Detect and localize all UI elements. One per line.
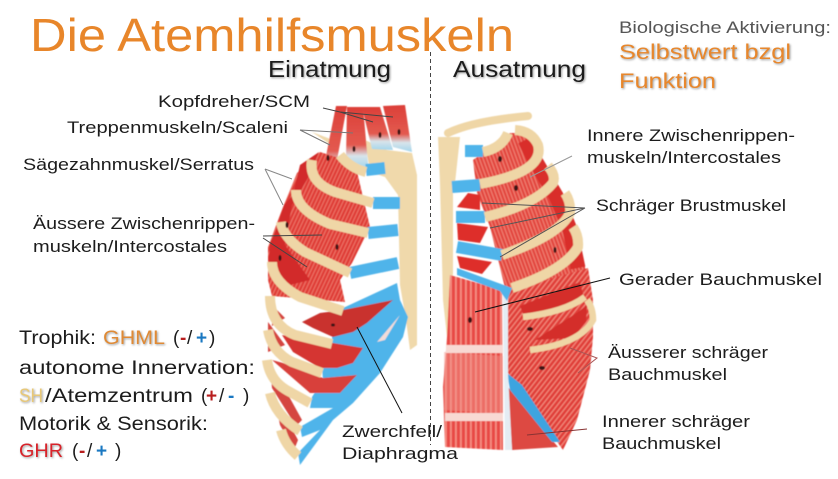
text block: trophic, autonomic, motor legend: GHML — [103, 328, 165, 349]
leader lines: inhalation — [263, 108, 402, 413]
text block: trophic, autonomic, motor legend: ) — [115, 441, 121, 462]
labels: exhalation muscles — [587, 126, 822, 453]
heading: Ausatmung: Ausatmung — [453, 56, 586, 82]
text block: trophic, autonomic, motor legend: ( — [201, 386, 208, 407]
ribs — [267, 155, 373, 456]
upper ribs — [480, 130, 578, 288]
labels: inhalation muscles: muskeln/Intercostales — [33, 237, 227, 256]
costal cartilages — [452, 151, 502, 255]
text block: biological activation — [619, 18, 831, 93]
labels: inhalation muscles: Treppenmuskeln/Scaleni — [67, 118, 288, 137]
text block: trophic, autonomic, motor legend: - — [228, 386, 234, 407]
intercostal muscles, upper — [268, 152, 370, 302]
inner intercostal muscles — [457, 193, 492, 274]
text block: trophic, autonomic, motor legend: /Atemzentrum — [45, 386, 193, 407]
white slit — [377, 315, 400, 342]
deep red outer band — [525, 140, 578, 268]
text block: trophic, autonomic, motor legend: / — [219, 386, 225, 407]
labels: exhalation muscles: Äusserer schräger — [608, 343, 768, 362]
costal cartilage and lower rib margin — [298, 283, 408, 465]
text block: biological activation: Biologische Aktivierung: — [619, 18, 831, 37]
pale linea alba — [503, 295, 512, 450]
internal oblique muscle — [508, 387, 558, 450]
text block: trophic, autonomic, motor legend: ( — [72, 441, 79, 462]
labels: inhalation muscles: Kopfdreher/SCM — [158, 92, 310, 111]
blue aponeurosis strip — [507, 373, 560, 442]
label: diaphragm: Zwerchfell/ — [342, 422, 442, 441]
label: diaphragm: Diaphragma — [342, 444, 459, 463]
text block: trophic, autonomic, motor legend — [19, 328, 255, 462]
label: diaphragm — [342, 422, 459, 463]
labels: exhalation muscles: Bauchmuskel — [602, 434, 721, 453]
text block: trophic, autonomic, motor legend: + — [196, 328, 207, 349]
text block: trophic, autonomic, motor legend: + — [96, 441, 107, 462]
sternum — [312, 132, 417, 350]
deep red between lower ribs — [520, 282, 587, 340]
labels: exhalation muscles: Gerader Bauchmuskel — [619, 270, 822, 289]
serratus fingers — [268, 152, 319, 285]
text block: trophic, autonomic, motor legend: ( — [173, 328, 180, 349]
text block: trophic, autonomic, motor legend: Trophik: — [19, 328, 96, 349]
illustration: inhalation ribcage — [267, 105, 417, 465]
text block: trophic, autonomic, motor legend: - — [180, 328, 186, 349]
illustration: exhalation ribcage — [438, 116, 593, 450]
diaphragm muscle — [272, 300, 393, 393]
labels: exhalation muscles: Innere Zwischenrippen- — [587, 126, 795, 145]
sternum — [438, 137, 460, 337]
lower intercostal strips — [268, 305, 302, 450]
heading: Einatmung: Einatmung — [268, 56, 391, 82]
labels: inhalation muscles: Sägezahnmuskel/Serratus — [23, 155, 254, 174]
text block: trophic, autonomic, motor legend: GHR — [19, 441, 63, 462]
lower ribs — [523, 297, 593, 350]
labels: exhalation muscles: Innerer schräger — [602, 412, 750, 431]
labels: exhalation muscles: Schräger Brustmuskel — [596, 196, 786, 215]
text block: trophic, autonomic, motor legend: ) — [209, 328, 215, 349]
title: Die Atemhilfsmuskeln — [30, 9, 514, 61]
upper costal cartilages — [350, 168, 400, 273]
labels: inhalation muscles — [23, 92, 310, 256]
text block: trophic, autonomic, motor legend: Motorik & Sensorik: — [19, 414, 208, 435]
labels: exhalation muscles: Bauchmuskel — [608, 365, 727, 384]
text block: trophic, autonomic, motor legend: - — [79, 441, 85, 462]
dashed divider between inhalation and exhalation — [430, 52, 432, 445]
intercostal muscles — [473, 133, 588, 296]
muscle centre marks — [468, 156, 556, 370]
text block: trophic, autonomic, motor legend: / — [187, 328, 193, 349]
text block: biological activation: Funktion — [619, 70, 716, 93]
text block: trophic, autonomic, motor legend: + — [206, 386, 217, 407]
rectus sheath top — [457, 268, 512, 301]
leader lines: exhalation — [475, 156, 610, 435]
neck muscles — [322, 105, 412, 178]
muscle centre marks — [278, 129, 400, 326]
labels: inhalation muscles: Äussere Zwischenrippen- — [33, 214, 255, 233]
text block: trophic, autonomic, motor legend: autonome Innervation: — [19, 358, 255, 379]
rectus abdominis — [443, 275, 503, 450]
text block: trophic, autonomic, motor legend: SH — [19, 386, 43, 407]
text block: trophic, autonomic, motor legend: / — [87, 441, 93, 462]
external oblique muscle — [505, 268, 593, 450]
labels: exhalation muscles: muskeln/Intercostales — [587, 148, 781, 167]
clavicle — [448, 116, 528, 133]
text block: trophic, autonomic, motor legend: ) — [243, 386, 249, 407]
text block: biological activation: Selbstwert bzgl — [619, 41, 791, 64]
